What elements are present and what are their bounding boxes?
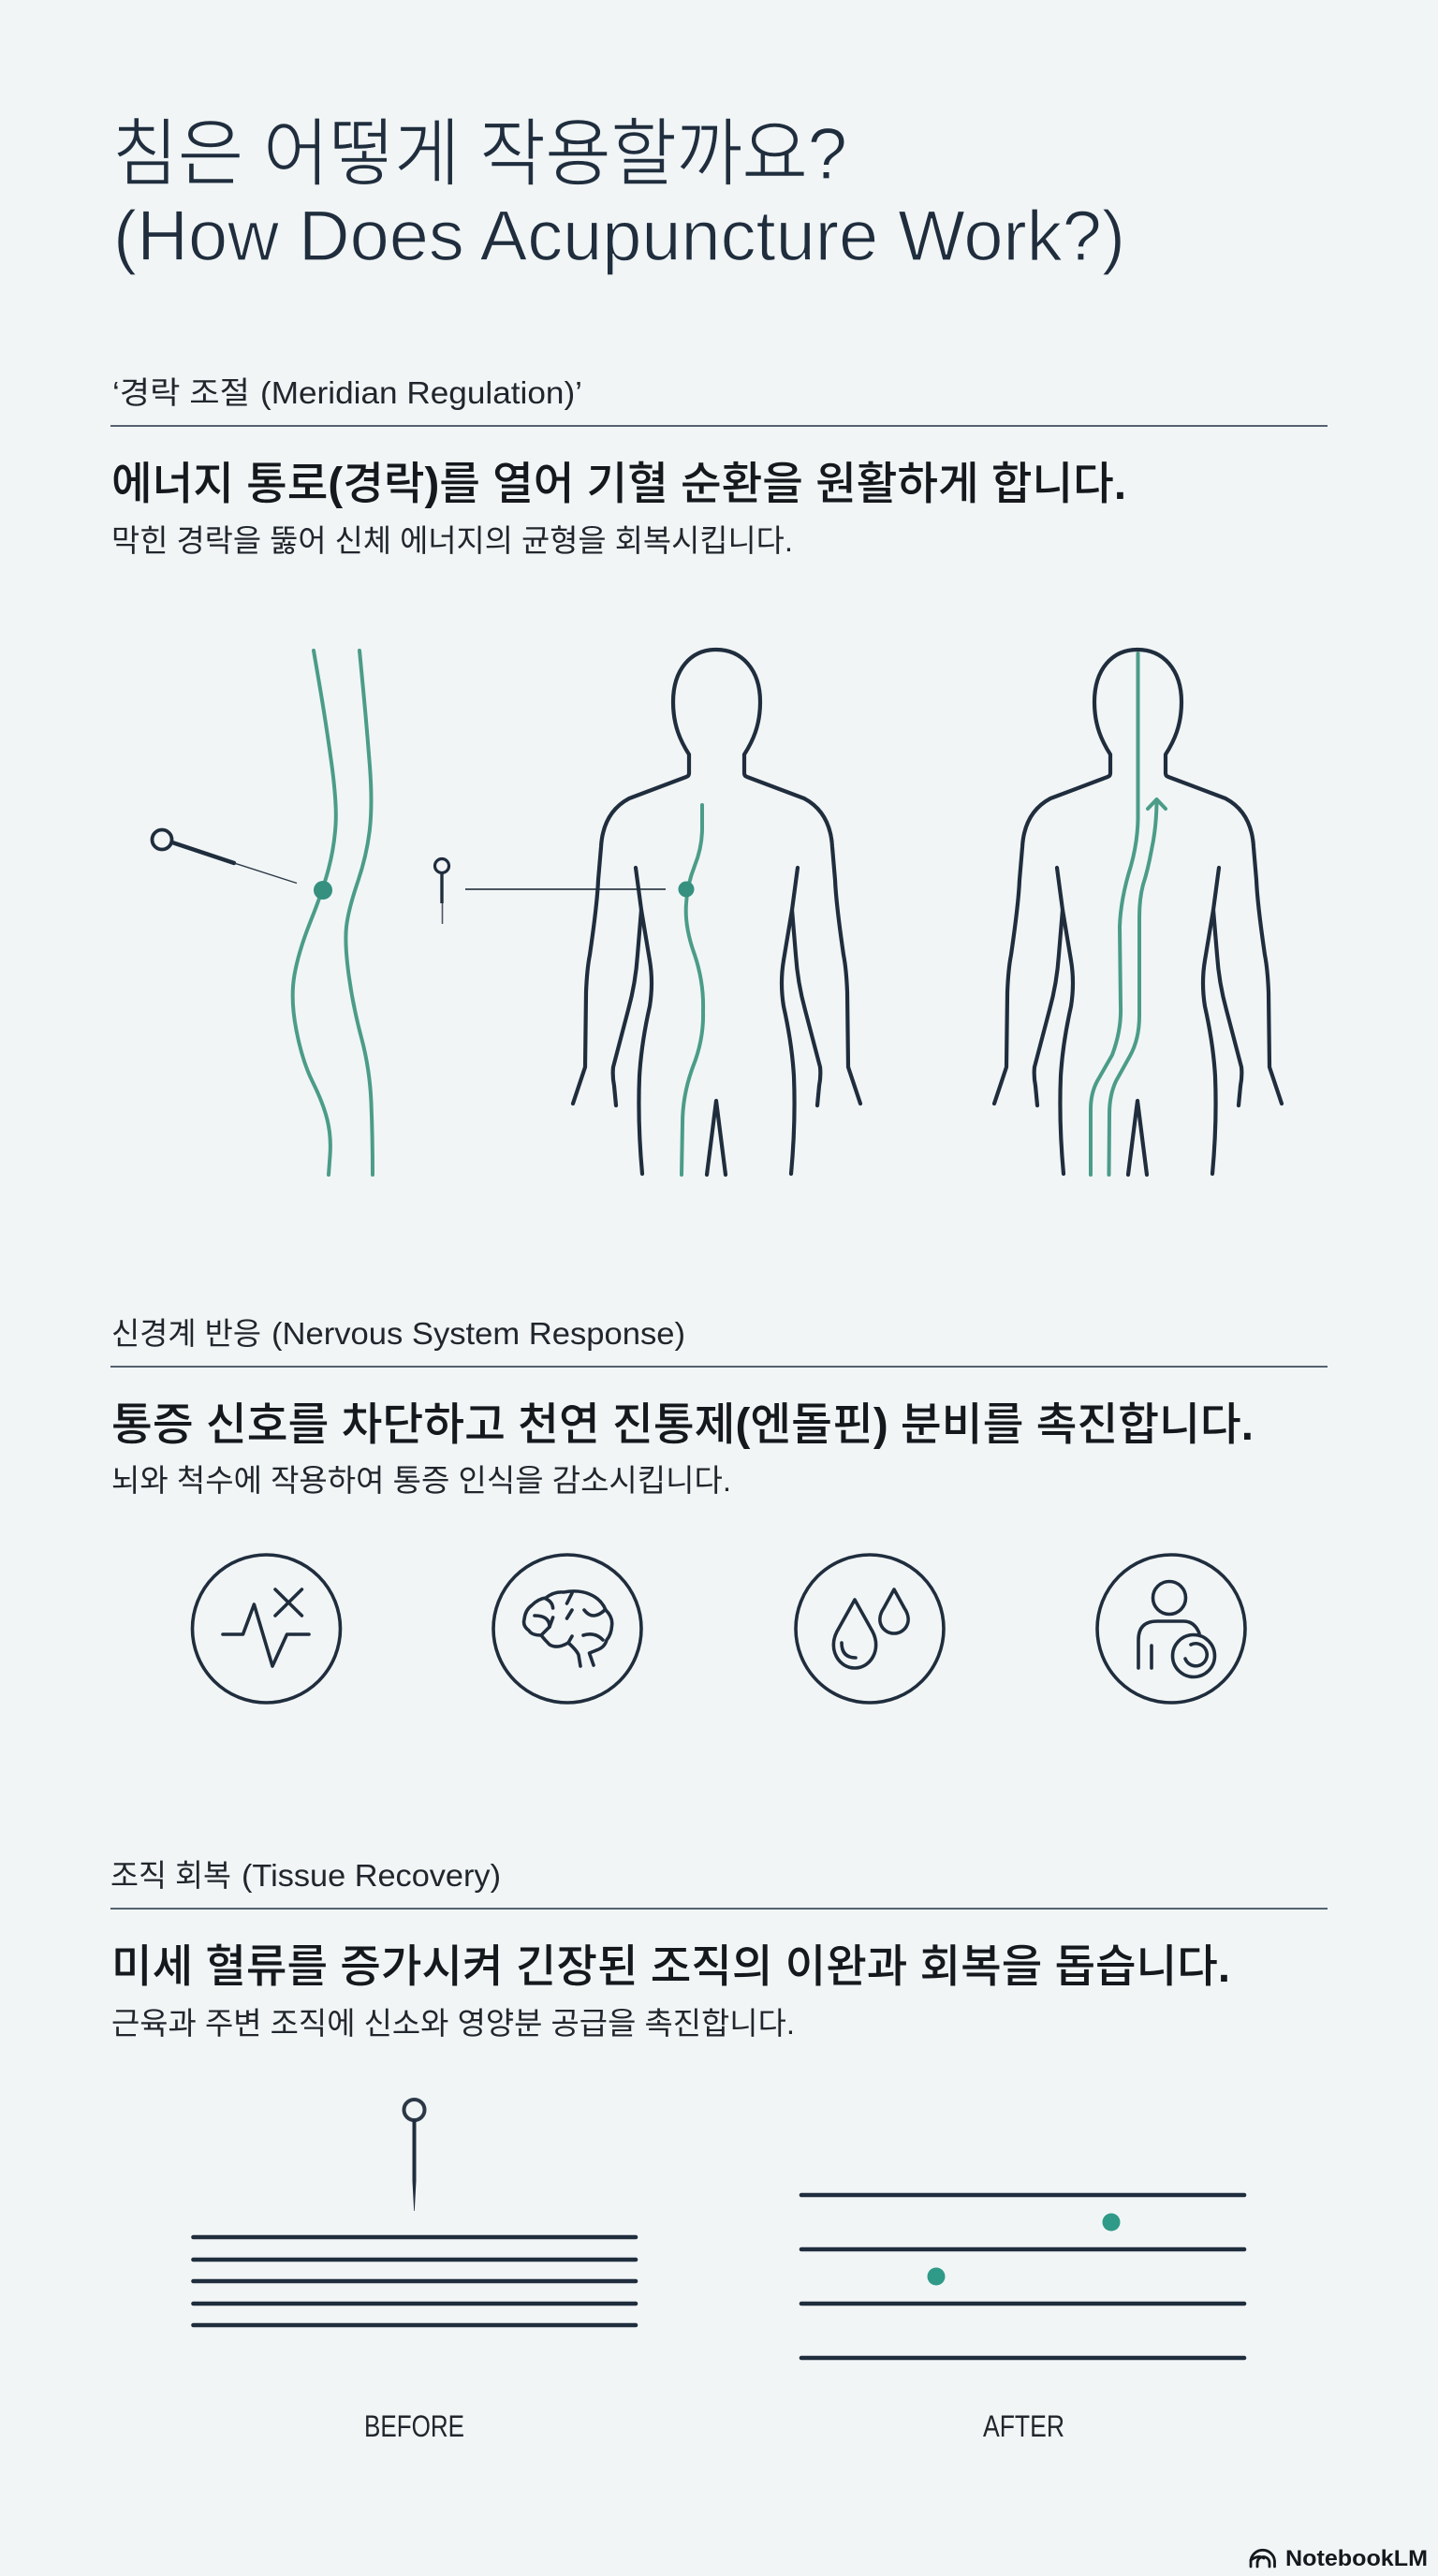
section label: (Meridian Regulation)’ xyxy=(260,375,582,410)
icon: needle xyxy=(404,2100,425,2211)
description: 근육과 주변 조직에 신소와 영양분 공급을 촉진합니다. xyxy=(111,2006,795,2041)
heading: 통증 신호를 차단하고 천연 진통제(엔돌핀) 분비를 촉진합니다. xyxy=(111,1400,1254,1450)
panel: nervous system response xyxy=(110,1316,1328,1703)
heading: 에너지 통로(경락)를 열어 기혈 순환을 원활하게 합니다. xyxy=(111,460,1126,509)
icon: person with recovery xyxy=(1097,1555,1245,1703)
heading: 미세 혈류를 증가시켜 긴장된 조직의 이완과 회복을 돕습니다. xyxy=(111,1942,1230,1992)
panel: meridian regulation xyxy=(110,375,1328,1175)
section label: (Nervous System Response) xyxy=(271,1316,685,1351)
after label: AFTER xyxy=(983,2409,1064,2443)
icon: angled needle xyxy=(152,829,297,884)
arrow: energy flow upward xyxy=(1148,799,1166,809)
section label xyxy=(112,375,582,410)
icon: upright needle with pointer xyxy=(434,859,666,924)
description: 막힌 경락을 뚫어 신체 에너지의 균형을 회복시킵니다. xyxy=(111,523,793,558)
diagram: before tense tissue xyxy=(193,2100,636,2443)
diagram: body outline with rising meridian flow xyxy=(994,650,1282,1175)
panel: tissue recovery xyxy=(110,1858,1328,2443)
section label xyxy=(110,1858,501,1893)
diagram: after relaxed tissue xyxy=(801,2195,1244,2443)
icon: brain xyxy=(493,1555,641,1703)
diagram: meridian close-up with needle xyxy=(152,651,373,1175)
section label xyxy=(111,1316,685,1351)
before label: BEFORE xyxy=(364,2409,464,2443)
title: 침은 어떻게 작용할까요? xyxy=(112,112,847,195)
diagram: body outline with meridian point xyxy=(573,650,860,1175)
description: 뇌와 척수에 작용하여 통증 인식을 감소시킵니다. xyxy=(111,1463,731,1498)
title: (How Does Acupuncture Work?) xyxy=(113,197,1125,276)
section label: ‘경락 조절 xyxy=(112,375,250,410)
logo: NotebookLM: NotebookLM xyxy=(1285,2546,1428,2571)
title xyxy=(112,112,1125,276)
section label: 조직 회복 xyxy=(110,1858,231,1893)
section label: 신경계 반응 xyxy=(111,1316,261,1351)
icon: blocked pain signal xyxy=(193,1555,341,1703)
section label: (Tissue Recovery) xyxy=(242,1858,501,1893)
icon: endorphin drops xyxy=(796,1555,944,1703)
